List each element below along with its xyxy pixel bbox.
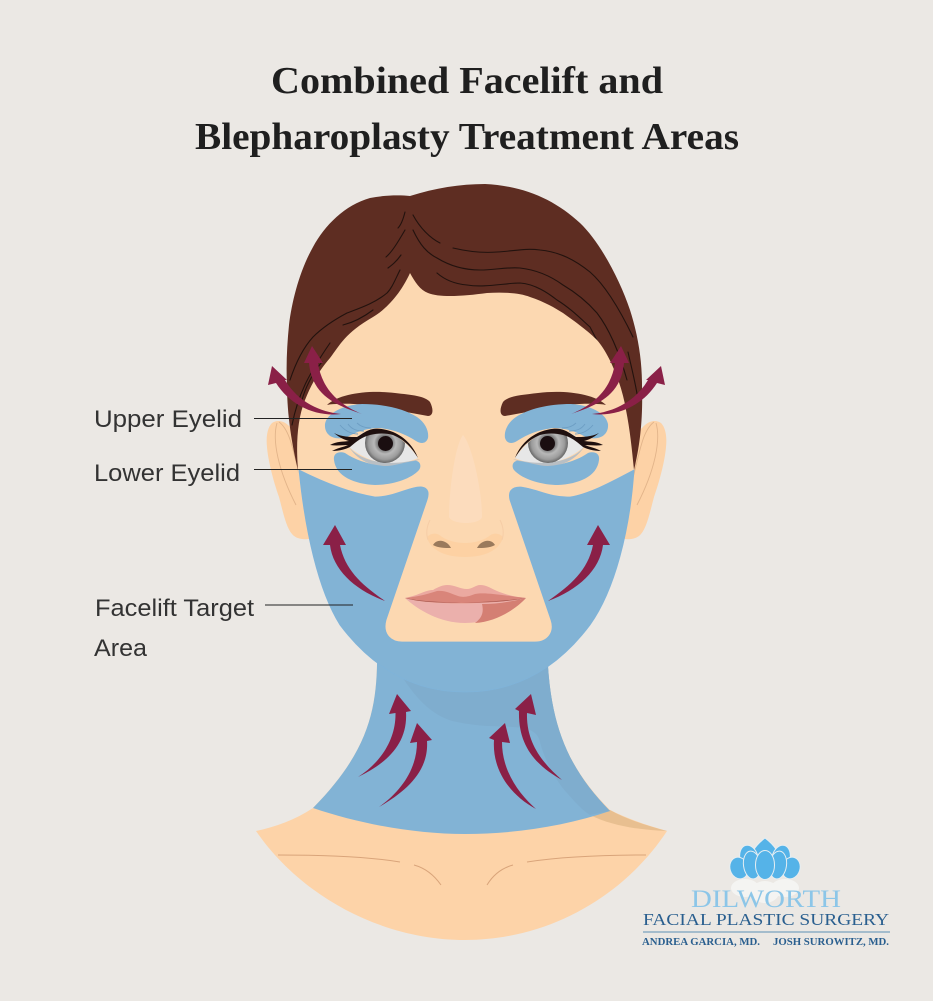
arrow: cheek — [323, 525, 385, 601]
logo: Dilworth Facial Plastic Surgery — [642, 838, 890, 948]
eyelid crease lines — [340, 423, 371, 434]
label: facelift target area: Facelift Target — [95, 595, 254, 622]
eyeball — [349, 423, 420, 467]
icon: lotus — [727, 838, 803, 903]
icon: right ear — [619, 421, 666, 539]
eyebrow — [327, 392, 432, 416]
upper eyelid area — [325, 404, 428, 443]
left eye and eyelid areas — [268, 346, 432, 601]
arrow: upper eyelid inner — [304, 346, 362, 414]
arrow: upper eyelid outer — [268, 366, 341, 414]
icon: left ear — [267, 421, 314, 539]
illustration: face and neck — [256, 184, 667, 940]
neck and shoulders — [256, 640, 667, 940]
logo doctors: ANDREA GARCIA, MD. — [642, 937, 760, 948]
right eye and eyelid areas — [501, 346, 665, 601]
label: facelift target area: Area — [94, 635, 148, 662]
lips — [405, 585, 526, 623]
title: Combined Facelift and — [271, 60, 663, 102]
eyelashes — [330, 429, 418, 458]
label: lower eyelid: Lower Eyelid — [94, 460, 240, 487]
facelift target area — [299, 470, 634, 692]
logo name: DILWORTH — [691, 886, 841, 913]
face skin — [297, 273, 634, 692]
logo subtitle: FACIAL PLASTIC SURGERY — [643, 910, 889, 929]
logo doctors — [642, 937, 889, 948]
lower eyelid area — [334, 452, 420, 485]
title — [195, 60, 739, 158]
arrows: neck — [358, 694, 562, 809]
title: Blepharoplasty Treatment Areas — [195, 116, 739, 158]
neck treatment area — [313, 640, 610, 834]
label: upper eyelid: Upper Eyelid — [94, 406, 242, 433]
nose — [427, 435, 503, 557]
label: facelift target area — [94, 595, 353, 662]
logo rule — [643, 931, 890, 933]
hair — [287, 184, 642, 470]
logo doctors: JOSH SUROWITZ, MD. — [773, 937, 889, 948]
